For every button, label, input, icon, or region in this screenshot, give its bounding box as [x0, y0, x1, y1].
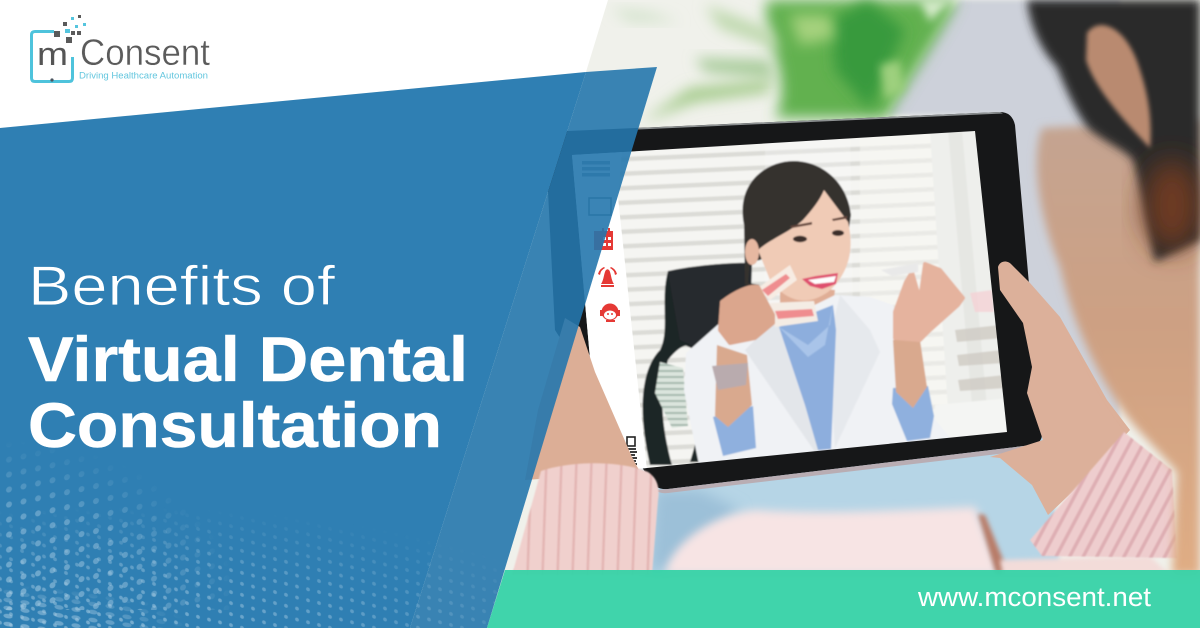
hair — [1027, 0, 1200, 262]
person: right sweater sleeve — [1030, 432, 1177, 558]
heading — [28, 254, 468, 461]
doctor: blue shirt — [779, 305, 836, 450]
logo — [32, 15, 211, 82]
doctor: dental model — [758, 265, 818, 327]
tablet body — [545, 112, 1042, 489]
panel: white logo area — [0, 0, 608, 128]
desk — [935, 400, 990, 436]
sidebar icons — [582, 161, 637, 464]
shelf with dental models — [955, 290, 1006, 391]
skin — [1037, 120, 1200, 575]
person: left sweater cuff — [512, 463, 659, 575]
logo wordmark: m — [37, 36, 68, 72]
logo: Consent — [80, 32, 211, 73]
sofa backdrop — [887, 0, 1120, 470]
doctor: watch — [712, 363, 748, 390]
doctor: coat — [683, 294, 906, 463]
heading line: virtual dental: Virtual Dental — [28, 325, 468, 395]
icon: menu — [582, 161, 610, 176]
heading line: benefits of: Benefits of — [28, 254, 336, 317]
icon: id card — [589, 198, 611, 215]
doctor: lips — [802, 273, 838, 289]
jeans — [640, 430, 1060, 575]
person: left hand — [525, 318, 640, 480]
icon: alarm bell — [598, 267, 617, 287]
chair — [643, 263, 752, 465]
person: right hand — [990, 261, 1130, 515]
doctor: hair back — [743, 161, 851, 285]
logo tagline: Driving Healthcare Automation — [79, 70, 208, 80]
doctor: sleeves — [713, 406, 756, 456]
panel: solid blue — [0, 72, 586, 628]
doctor: face — [758, 190, 851, 301]
tablet — [545, 112, 1043, 493]
plant foliage — [610, 0, 958, 122]
tablet screen — [572, 131, 1007, 468]
person: blurred pink sleeve — [665, 507, 1000, 575]
doctor: left hand — [720, 287, 773, 343]
person: head — [1027, 0, 1200, 575]
aligner — [883, 265, 918, 276]
panel: translucent blue band — [410, 67, 657, 628]
doctor: eyes and brows — [790, 216, 847, 242]
icon: support agent — [600, 304, 620, 321]
logo pixels — [54, 15, 86, 43]
doctor: ear — [745, 239, 759, 265]
icon: calendar — [594, 228, 613, 250]
doctor: forearms — [715, 345, 752, 427]
sidebar — [585, 196, 646, 468]
doctor: neck — [779, 288, 836, 306]
dot pattern — [0, 440, 500, 628]
logo tablet icon — [32, 32, 72, 82]
heading line: consultation: Consultation — [28, 391, 442, 461]
doctor: right hand — [895, 264, 963, 340]
icon: qr code — [627, 437, 637, 464]
ear — [1086, 25, 1151, 148]
website url: www.mconsent.net — [917, 582, 1152, 612]
footer bar — [487, 570, 1200, 628]
